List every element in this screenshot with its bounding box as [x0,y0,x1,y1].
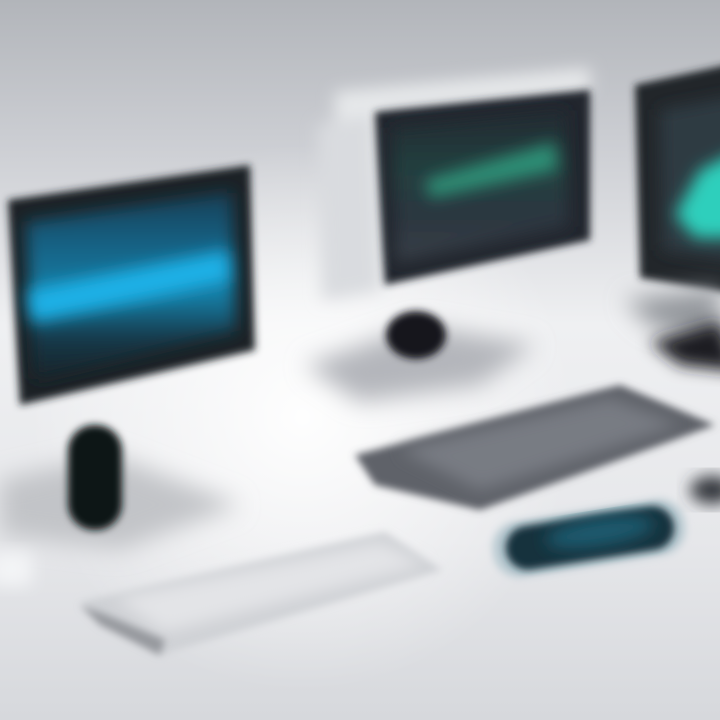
monitor 2 screen [375,90,590,285]
monitor 1 screen [8,165,255,405]
monitor 2 silver housing [318,68,590,300]
white keyboard [80,532,442,655]
tablet [355,385,715,510]
monitor 2 stand and base [305,311,535,402]
monitor 1 stand and base [0,425,240,550]
small dark device [690,476,720,504]
small white object [0,552,32,586]
monitor 3 [625,62,720,372]
phone [489,495,689,581]
